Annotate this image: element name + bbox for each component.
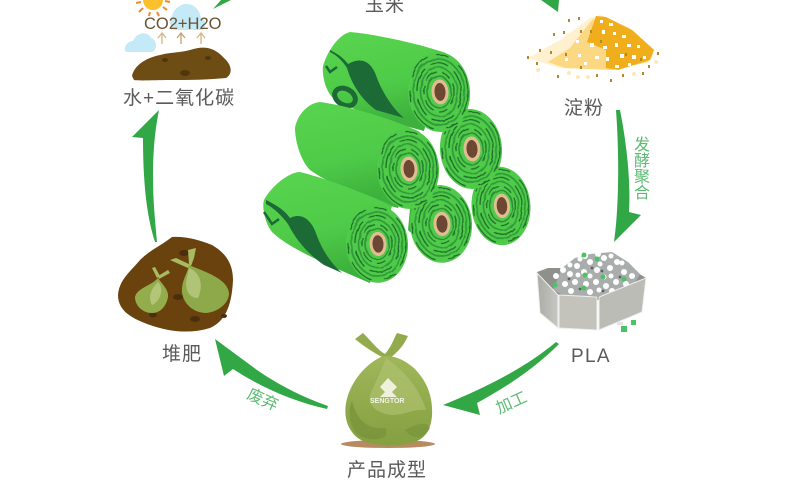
roll: mid right bbox=[437, 107, 505, 191]
icon: right cloud bbox=[170, 4, 205, 30]
arrow: processing bbox=[443, 342, 559, 415]
roll: back right bbox=[469, 165, 533, 247]
label: starch: 淀粉 bbox=[564, 97, 604, 119]
small bag bbox=[135, 267, 170, 313]
label: fermentation polymerization: 聚 bbox=[634, 169, 650, 186]
roll: top bbox=[323, 32, 473, 134]
icon: product bag bbox=[341, 333, 435, 448]
arrow: disposal bbox=[215, 339, 328, 409]
roll: middle left bbox=[295, 102, 442, 211]
label: disposal: 废弃 bbox=[244, 385, 281, 415]
arrow: top left fragment bbox=[213, 0, 231, 9]
arrow: corn to starch bbox=[541, 0, 559, 12]
large bag bbox=[170, 248, 229, 313]
label: fermentation polymerization: 合 bbox=[634, 184, 650, 202]
icon: PLA tub bbox=[537, 251, 646, 332]
roll: bottom middle bbox=[407, 183, 475, 265]
label: compost: 堆肥 bbox=[162, 343, 202, 365]
arrow: to water and CO2 bbox=[132, 110, 159, 242]
icon: starch pile bbox=[527, 15, 659, 82]
label: product forming: 产品成型 bbox=[347, 459, 427, 481]
icon: soil mound bbox=[132, 48, 231, 80]
roll: bottom left bbox=[263, 172, 411, 285]
label: water and carbon dioxide: 水+二氧化碳 bbox=[123, 87, 235, 109]
label: CO2+H2O: CO2+H2O bbox=[144, 15, 222, 33]
label: processing: 加工 bbox=[493, 388, 530, 418]
icon: rising arrows bbox=[158, 33, 205, 44]
icon: compost bbox=[118, 237, 233, 332]
icon: left cloud bbox=[125, 33, 156, 52]
label: fermentation polymerization: 发 bbox=[634, 137, 650, 154]
label: PLA: PLA bbox=[571, 346, 611, 367]
label: fermentation polymerization: 酵 bbox=[634, 152, 650, 170]
image: stacked green bag rolls bbox=[263, 32, 533, 285]
bag brand: SENGTOR bbox=[370, 398, 404, 405]
icon: sun bbox=[136, 0, 170, 16]
arrow: fermentation bbox=[614, 110, 641, 242]
bag logo bbox=[380, 378, 397, 397]
